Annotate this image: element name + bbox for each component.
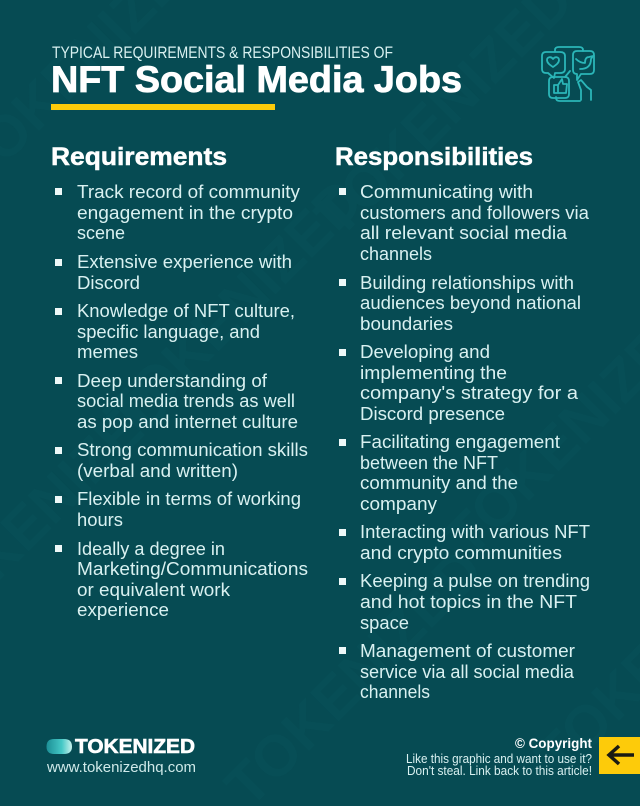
- copyright text: Like this graphic and want to use it?: [406, 752, 592, 766]
- bullet: degree: Marketing/Communications: [77, 559, 308, 579]
- bullet: discord experience: Discord: [77, 273, 140, 293]
- panel: requirements: [51, 143, 308, 620]
- logo wordmark: TOKENIZED: [75, 736, 195, 758]
- bullet: trends: [55, 371, 298, 432]
- bullet: engagement: [339, 432, 560, 514]
- copyright note: Don't steal. Link back to this article!: [407, 764, 592, 778]
- logo: tokenized: [46, 736, 196, 776]
- bullet: communities: [339, 522, 590, 563]
- bullet: flexible hours: hours: [77, 510, 123, 530]
- bullet: track record: engagement in the crypto: [77, 203, 293, 223]
- bullet: nft culture: [55, 301, 295, 362]
- text: TOKENIZED: [93, 167, 375, 449]
- bullet: strategy: company's strategy for a: [360, 383, 579, 403]
- bullet: communication: (verbal and written): [77, 461, 238, 481]
- bullet: discord experience: [55, 252, 292, 293]
- subtitle: TYPICAL REQUIREMENTS & RESPONSIBILITIES OF: [52, 44, 393, 62]
- title underline: [51, 104, 275, 110]
- bullet: flexible hours: Flexible in terms of working: [77, 489, 301, 509]
- bullet: relationships: Building relationships with: [360, 273, 574, 293]
- bullet: nft culture: memes: [77, 342, 138, 362]
- bullet: communicating: [339, 182, 590, 264]
- bullet: communicating: customers and followers via: [360, 203, 590, 223]
- main title: NFT Social Media Jobs: [51, 59, 462, 100]
- bullet: nft culture: Knowledge of NFT culture,: [77, 301, 295, 321]
- bullet: strategy: [339, 342, 579, 424]
- bullet: trends: as pop and internet culture: [77, 412, 298, 432]
- bullet: engagement: between the NFT: [360, 453, 498, 473]
- bullet: relationships: [339, 273, 581, 334]
- bullet: strategy: Developing and: [360, 342, 490, 362]
- bullet: trends: Deep understanding of: [77, 371, 268, 391]
- bullet: communication: Strong communication skills: [77, 440, 308, 460]
- bullet: relationships: audiences beyond national: [360, 293, 581, 313]
- bullet: engagement: Facilitating engagement: [360, 432, 560, 452]
- bullet: degree: experience: [77, 600, 169, 620]
- bullet: flexible hours: [55, 489, 301, 530]
- bullet: strategy: implementing the: [360, 363, 507, 383]
- heading: requirements: Requirements: [51, 143, 227, 171]
- heading: responsibilities: Responsibilities: [335, 143, 533, 171]
- bullet: engagement: community and the: [360, 473, 518, 493]
- bullet: communication: [55, 440, 308, 481]
- copyright heading: © Copyright: [515, 736, 592, 751]
- bullet: communicating: Communicating with: [360, 182, 533, 202]
- bullet: track record: scene: [77, 223, 125, 243]
- bullet: communicating: channels: [360, 244, 432, 264]
- bullet: customer service: service via all social media: [360, 662, 575, 682]
- bullet: track record: Track record of community: [77, 182, 300, 202]
- bullet: trending topics: Keeping a pulse on trending: [360, 571, 590, 591]
- bullet: engagement: company: [360, 494, 437, 514]
- bullet: degree: or equivalent work: [77, 580, 231, 600]
- icon: social media phone: [542, 47, 594, 101]
- bullet: strategy: Discord presence: [360, 404, 505, 424]
- bullet: communities: and crypto communities: [360, 543, 562, 563]
- bullet: customer service: Management of customer: [360, 641, 575, 661]
- icon: yellow arrow box: [599, 737, 640, 774]
- bullet: communities: Interacting with various NFT: [360, 522, 590, 542]
- bullet: communicating: all relevant social media: [360, 223, 568, 243]
- bullet: trending topics: and hot topics in the NFT: [360, 592, 577, 612]
- copyright note: [406, 736, 592, 778]
- bullet: degree: Ideally a degree in: [77, 539, 225, 559]
- bullet: trends: social media trends as well: [77, 391, 295, 411]
- bullet: discord experience: Extensive experience with: [77, 252, 292, 272]
- title block: [51, 44, 462, 110]
- icon: logo mark: [46, 739, 72, 754]
- panel: responsibilities: [335, 143, 590, 702]
- bullet: degree: [55, 539, 308, 620]
- bullet: track record: [55, 182, 300, 243]
- website url: www.tokenizedhq.com: [46, 760, 196, 776]
- bullet: trending topics: [339, 571, 590, 633]
- bullet: relationships: boundaries: [360, 314, 453, 334]
- bullet: customer service: channels: [360, 682, 430, 702]
- bullet: customer service: [339, 641, 575, 702]
- bullet: nft culture: specific language, and: [77, 322, 260, 342]
- bullet: trending topics: space: [360, 613, 409, 633]
